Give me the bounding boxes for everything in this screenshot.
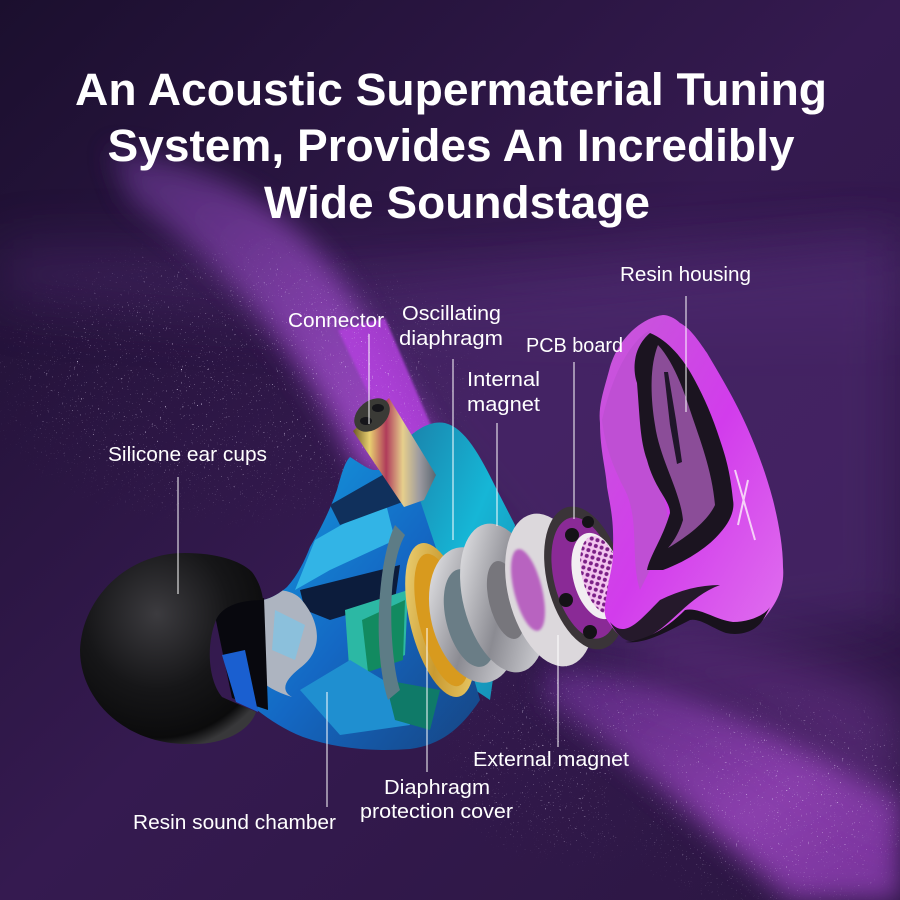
- PCB board: [530, 498, 640, 658]
- label: oscillating diaphragm: [399, 303, 503, 350]
- external magnet: [490, 504, 610, 676]
- label: diaphragm protection cover: Diaphragm: [384, 777, 490, 799]
- label: PCB board: PCB board: [526, 335, 623, 357]
- resin housing: [600, 315, 783, 642]
- title: System, Provides An Incredibly: [108, 120, 795, 171]
- label: resin housing: Resin housing: [620, 264, 751, 286]
- internal magnet: [446, 515, 560, 681]
- label: external magnet: External magnet: [473, 749, 629, 771]
- component labels: [108, 264, 751, 834]
- oscillating diaphragm: [416, 538, 530, 692]
- icon: connector pins: [348, 391, 436, 507]
- rear shell: [400, 422, 515, 700]
- title: An Acoustic Supermaterial Tuning: [75, 64, 827, 115]
- label: diaphragm protection cover: [360, 777, 513, 823]
- label: internal magnet: Internal: [467, 369, 540, 391]
- label: silicone ear cups: Silicone ear cups: [108, 444, 267, 466]
- label: resin sound chamber: Resin sound chamber: [133, 812, 336, 834]
- label: internal magnet: [467, 369, 540, 416]
- resin sound chamber shell: [257, 457, 480, 750]
- label: internal magnet: magnet: [467, 394, 540, 416]
- silicone ear cup: [80, 553, 268, 744]
- label: oscillating diaphragm: diaphragm: [399, 328, 503, 350]
- title: [75, 64, 827, 228]
- label: diaphragm protection cover: protection cover: [360, 801, 513, 823]
- diaphragm protection cover: [392, 536, 488, 704]
- leader lines: [178, 296, 686, 807]
- title: Wide Soundstage: [264, 177, 650, 228]
- label: connector: Connector: [288, 310, 384, 332]
- label: oscillating diaphragm: Oscillating: [402, 303, 501, 325]
- earphone exploded view: [80, 315, 783, 755]
